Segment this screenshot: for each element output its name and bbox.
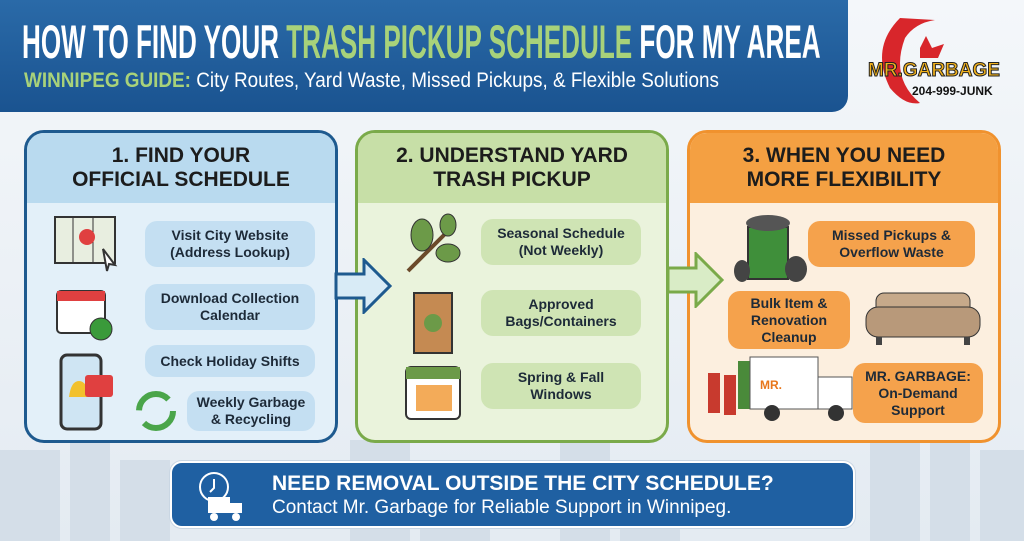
header banner (0, 0, 848, 112)
pill: mr garbage support (853, 363, 983, 423)
panel: understand yard trash pickup (355, 130, 669, 443)
pill: check holiday shifts (145, 345, 315, 377)
pill: bulk item: Cleanup (761, 328, 817, 344)
heading: MORE FLEXIBILITY (747, 168, 941, 191)
pill: weekly garbage & recycling: & Recycling (211, 411, 291, 427)
heading: TRASH PICKUP (433, 168, 591, 191)
pill: download collection calendar: Download Collection (161, 290, 299, 306)
logo: 204-999-JUNK (912, 84, 993, 98)
icon: leaves (406, 214, 460, 272)
pill: missed pickups: Overflow Waste (839, 244, 944, 260)
pill: mr garbage support: On-Demand (878, 384, 958, 400)
arrow: 1 to 2 (334, 258, 392, 314)
logo: MR.GARBAGE (868, 60, 1000, 81)
heading (27, 133, 335, 203)
icon: phone (60, 354, 113, 430)
icon: truck with workers: MR. (760, 378, 782, 392)
panel: when you need more flexibility (687, 130, 1001, 443)
pill: missed pickups (808, 221, 975, 267)
pill: visit city website: (Address Lookup) (170, 244, 290, 260)
subtitle: WINNIPEG GUIDE: City Routes, Yard Waste, Missed Pickups, & Flexible Solutions (24, 69, 719, 92)
pill: check holiday shifts: Check Holiday Shifts (160, 352, 300, 368)
pill: bulk item (728, 291, 850, 349)
pill: seasonal schedule: (Not Weekly) (519, 242, 603, 258)
heading (358, 133, 666, 203)
icon: couch (866, 292, 980, 345)
pill: approved bags/containers: Bags/Containers (505, 313, 617, 329)
icon: calendar (405, 366, 461, 420)
icon: recycle arrows (136, 391, 176, 431)
pill: spring & fall windows: Windows (530, 386, 592, 402)
pill: mr garbage support: MR. GARBAGE: (865, 368, 971, 384)
pill: visit city website: Visit City Website (172, 227, 288, 243)
heading: 3. WHEN YOU NEED (743, 144, 945, 167)
footer callout (170, 461, 855, 528)
heading: OFFICIAL SCHEDULE (72, 168, 290, 191)
footer text (272, 472, 774, 518)
pill: download collection calendar (145, 284, 315, 330)
icon: paper bag (413, 292, 453, 354)
pill: approved bags/containers: Approved (528, 296, 594, 312)
arrow: 2 to 3 (669, 252, 724, 308)
heading: 1. FIND YOUR (112, 144, 250, 167)
pill: missed pickups: Missed Pickups & (832, 227, 951, 243)
pill: seasonal schedule: Seasonal Schedule (497, 225, 625, 241)
pill: approved bags/containers (481, 290, 641, 336)
panel: find your official schedule (24, 130, 338, 443)
logo (868, 18, 1000, 104)
heading (690, 133, 998, 203)
pill: weekly garbage & recycling (187, 391, 315, 431)
icon: map (54, 216, 118, 272)
heading: 2. UNDERSTAND YARD (396, 144, 628, 167)
pill: weekly garbage & recycling: Weekly Garbage (197, 394, 305, 410)
pill: download collection calendar: Calendar (200, 307, 260, 323)
pill: spring & fall windows (481, 363, 641, 409)
icon: truck with workers (708, 356, 852, 421)
icon: clock truck (199, 472, 242, 521)
pill: visit city website (145, 221, 315, 267)
skyline background (0, 440, 1024, 541)
icon: trash bin (734, 215, 807, 282)
title: HOW TO FIND YOUR TRASH PICKUP SCHEDULE FOR MY AREA (22, 15, 821, 68)
icon: calendar (56, 290, 112, 340)
footer text: Contact Mr. Garbage for Reliable Support in Winnipeg. (272, 497, 731, 518)
pill: mr garbage support: Support (891, 402, 945, 418)
footer text: NEED REMOVAL OUTSIDE THE CITY SCHEDULE? (272, 472, 774, 495)
pill: bulk item: Bulk Item & (750, 294, 828, 310)
pill: spring & fall windows: Spring & Fall (518, 369, 604, 385)
pill: bulk item: Renovation (751, 312, 827, 328)
pill: seasonal schedule (481, 219, 641, 265)
